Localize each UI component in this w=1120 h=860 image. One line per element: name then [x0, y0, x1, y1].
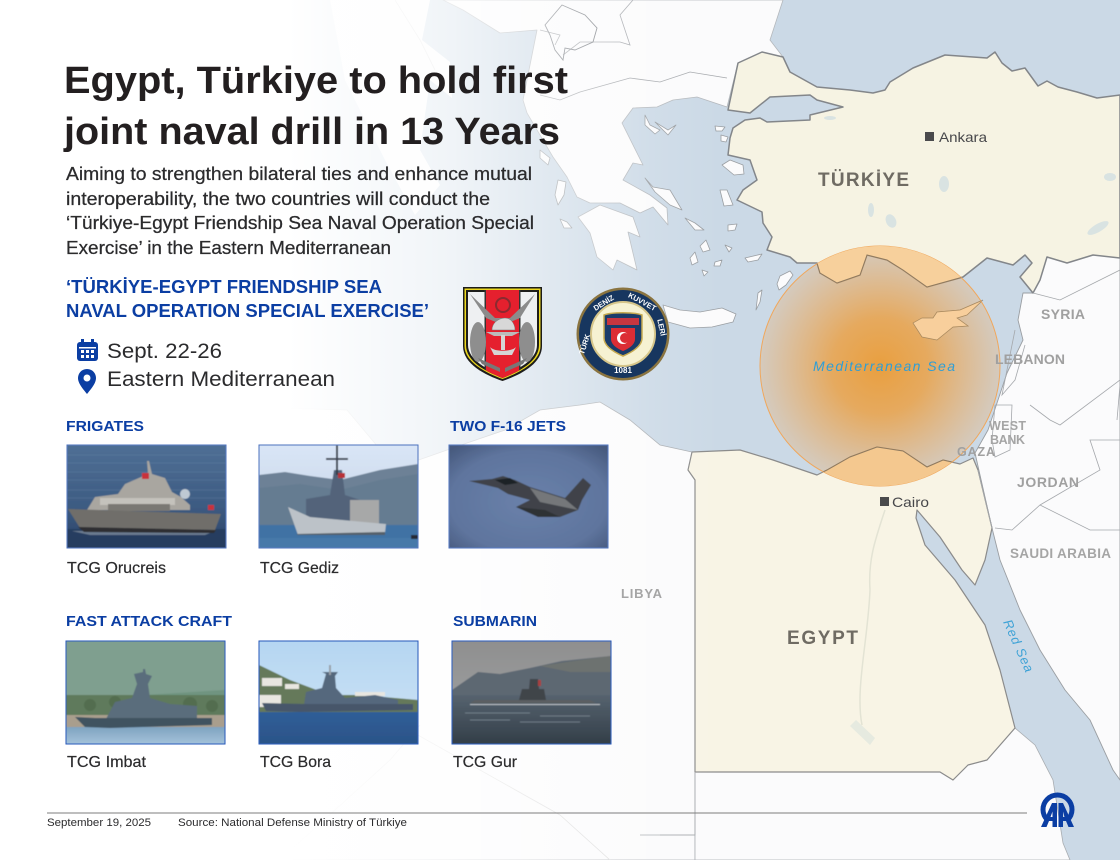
map label: Saudi Arabia: SAUDI ARABIA — [1010, 546, 1111, 561]
emblem: Turkish Naval Forces seal: TÜRK — [577, 332, 592, 356]
exercise name heading: ‘TÜRKİYE-EGYPT FRIENDSHIP SEA — [66, 277, 382, 297]
exercise name heading: NAVAL OPERATION SPECIAL EXERCISE’ — [66, 301, 429, 321]
title — [63, 60, 568, 153]
map label: Red Sea: Red Sea — [1000, 617, 1037, 674]
emblem: Turkish Naval Forces seal: DENİZ — [592, 293, 616, 313]
emblem: Turkish Naval Forces seal: KUVVET — [627, 291, 658, 313]
section heading: frigates: FRIGATES — [66, 418, 144, 435]
map label: Ankara: Ankara — [939, 129, 987, 145]
white fade over left side — [0, 0, 720, 860]
map label: West Bank: BANK — [990, 433, 1025, 447]
map label: Syria: SYRIA — [1041, 306, 1085, 322]
intro text: interoperability, the two countries will conduct the — [66, 189, 490, 209]
icon: location pin — [78, 369, 96, 394]
land: Libya — [0, 400, 695, 860]
map label: Jordan: JORDAN — [1017, 474, 1079, 490]
footer source: Source: National Defense Ministry of Türkiye — [178, 817, 407, 829]
map label: Cairo — [880, 494, 929, 510]
caption: TCG Gediz: TCG Gediz — [260, 560, 339, 577]
title: joint naval drill in 13 Years — [63, 111, 560, 153]
map label: West Bank: WEST — [989, 419, 1026, 433]
map label: Egypt: EGYPT — [787, 628, 858, 649]
land: Egypt — [688, 447, 1015, 780]
land: Crete and Aegean islands — [540, 115, 793, 328]
icon: calendar — [77, 339, 98, 361]
photo: TCG Orucreis — [67, 445, 226, 548]
photo: TCG Gediz — [259, 445, 418, 548]
photo: TCG Gur — [452, 641, 611, 744]
land: Syria, Jordan, Saudi Arabia — [975, 250, 1120, 780]
title: Egypt, Türkiye to hold first — [64, 60, 568, 102]
map label: Mediterranean Sea: Mediterranean Sea — [813, 358, 955, 374]
footer rule — [47, 812, 1027, 814]
exercise area circle — [760, 246, 1000, 486]
date text: Sept. 22-26 — [107, 340, 222, 363]
country borders — [540, 0, 1120, 835]
footer date: September 19, 2025 — [47, 817, 151, 829]
photo: TCG Bora — [259, 641, 418, 744]
section heading: fast attack craft: FAST ATTACK CRAFT — [66, 613, 232, 630]
map label: West Bank — [989, 419, 1026, 447]
caption: TCG Orucreis: TCG Orucreis — [67, 560, 166, 577]
section heading: jets: TWO F-16 JETS — [450, 418, 566, 435]
map label: Cairo: Cairo — [892, 494, 929, 510]
caption: TCG Imbat: TCG Imbat — [67, 754, 147, 771]
emblem: Turkish Naval Forces seal: 1081 — [614, 366, 632, 375]
exercise name heading — [66, 277, 429, 321]
lakes and rivers — [824, 116, 1116, 745]
location text: Eastern Mediterranean — [107, 368, 335, 391]
map label: Lebanon: LEBANON — [995, 351, 1065, 367]
photo: TCG Imbat — [66, 641, 225, 744]
intro text: ‘Türkiye-Egypt Friendship Sea Naval Operation Special — [66, 213, 534, 233]
Kosovo border — [545, 5, 597, 60]
land: Sudan corner — [695, 728, 1070, 860]
caption: TCG Gur: TCG Gur — [453, 754, 518, 771]
section heading: submarine: SUBMARIN — [453, 613, 537, 630]
emblem: Turkish Armed Forces shield — [463, 287, 542, 381]
land: Türkiye — [728, 52, 1120, 293]
intro text — [66, 164, 534, 258]
intro text: Aiming to strengthen bilateral ties and enhance mutual — [66, 164, 532, 184]
map label: Libya: LIBYA — [621, 586, 663, 601]
emblem: Turkish Naval Forces seal: LERİ — [655, 318, 668, 337]
logo: Anadolu Agency — [1041, 795, 1074, 827]
photo: F-16 jet — [449, 445, 608, 548]
land: Cyprus — [913, 300, 983, 340]
emblem: Turkish Naval Forces seal — [576, 288, 670, 380]
land: Italy — [330, 0, 452, 215]
map label: Gaza: GAZA — [957, 445, 995, 459]
intro text: Exercise’ in the Eastern Mediterranean — [66, 238, 391, 258]
map label: Türkiye: TÜRKİYE — [818, 170, 909, 191]
land: Balkans and Greece — [443, 0, 783, 270]
caption: TCG Bora: TCG Bora — [260, 754, 331, 771]
